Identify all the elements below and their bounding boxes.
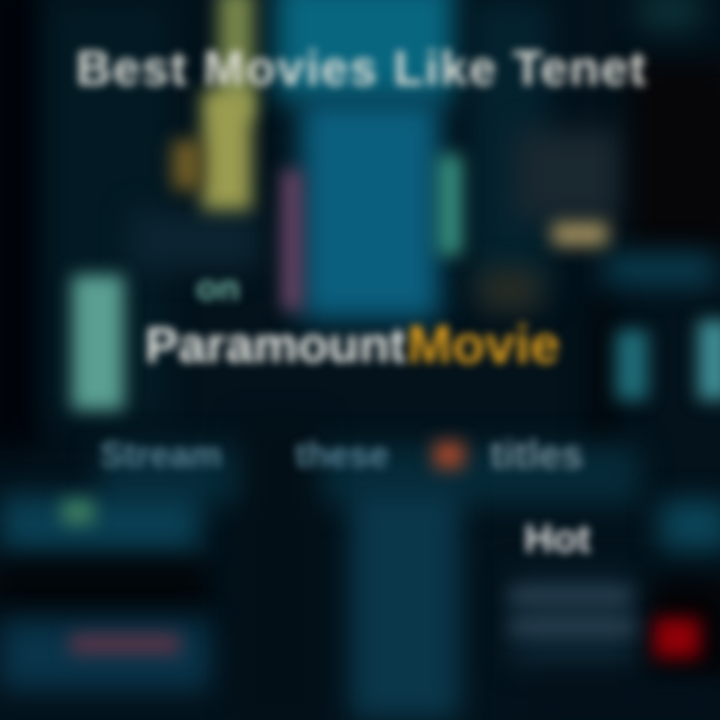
highlighted word: Movie xyxy=(407,315,560,375)
subtitle right: titles xyxy=(490,433,583,477)
pink vertical sign xyxy=(282,170,302,310)
warm lamp xyxy=(552,222,608,246)
subtitle middle: these xyxy=(295,434,389,475)
yellow-green sign xyxy=(160,0,268,224)
highlighted small word: Hot xyxy=(524,517,591,561)
pale teal signs right xyxy=(604,308,720,412)
teal vertical sign xyxy=(438,155,462,255)
lower text lines xyxy=(506,582,640,639)
service name: Paramount xyxy=(145,317,406,373)
red light xyxy=(654,618,700,658)
orange light xyxy=(434,442,464,468)
pale teal sign left xyxy=(72,275,124,410)
colored car lights xyxy=(70,634,180,654)
subtitle line xyxy=(98,433,586,477)
connector word: on xyxy=(196,267,240,308)
streaming heading xyxy=(141,315,564,375)
title: Best Movies Like Tenet xyxy=(76,42,647,96)
green light xyxy=(62,500,94,524)
subtitle left: Stream xyxy=(100,434,222,475)
